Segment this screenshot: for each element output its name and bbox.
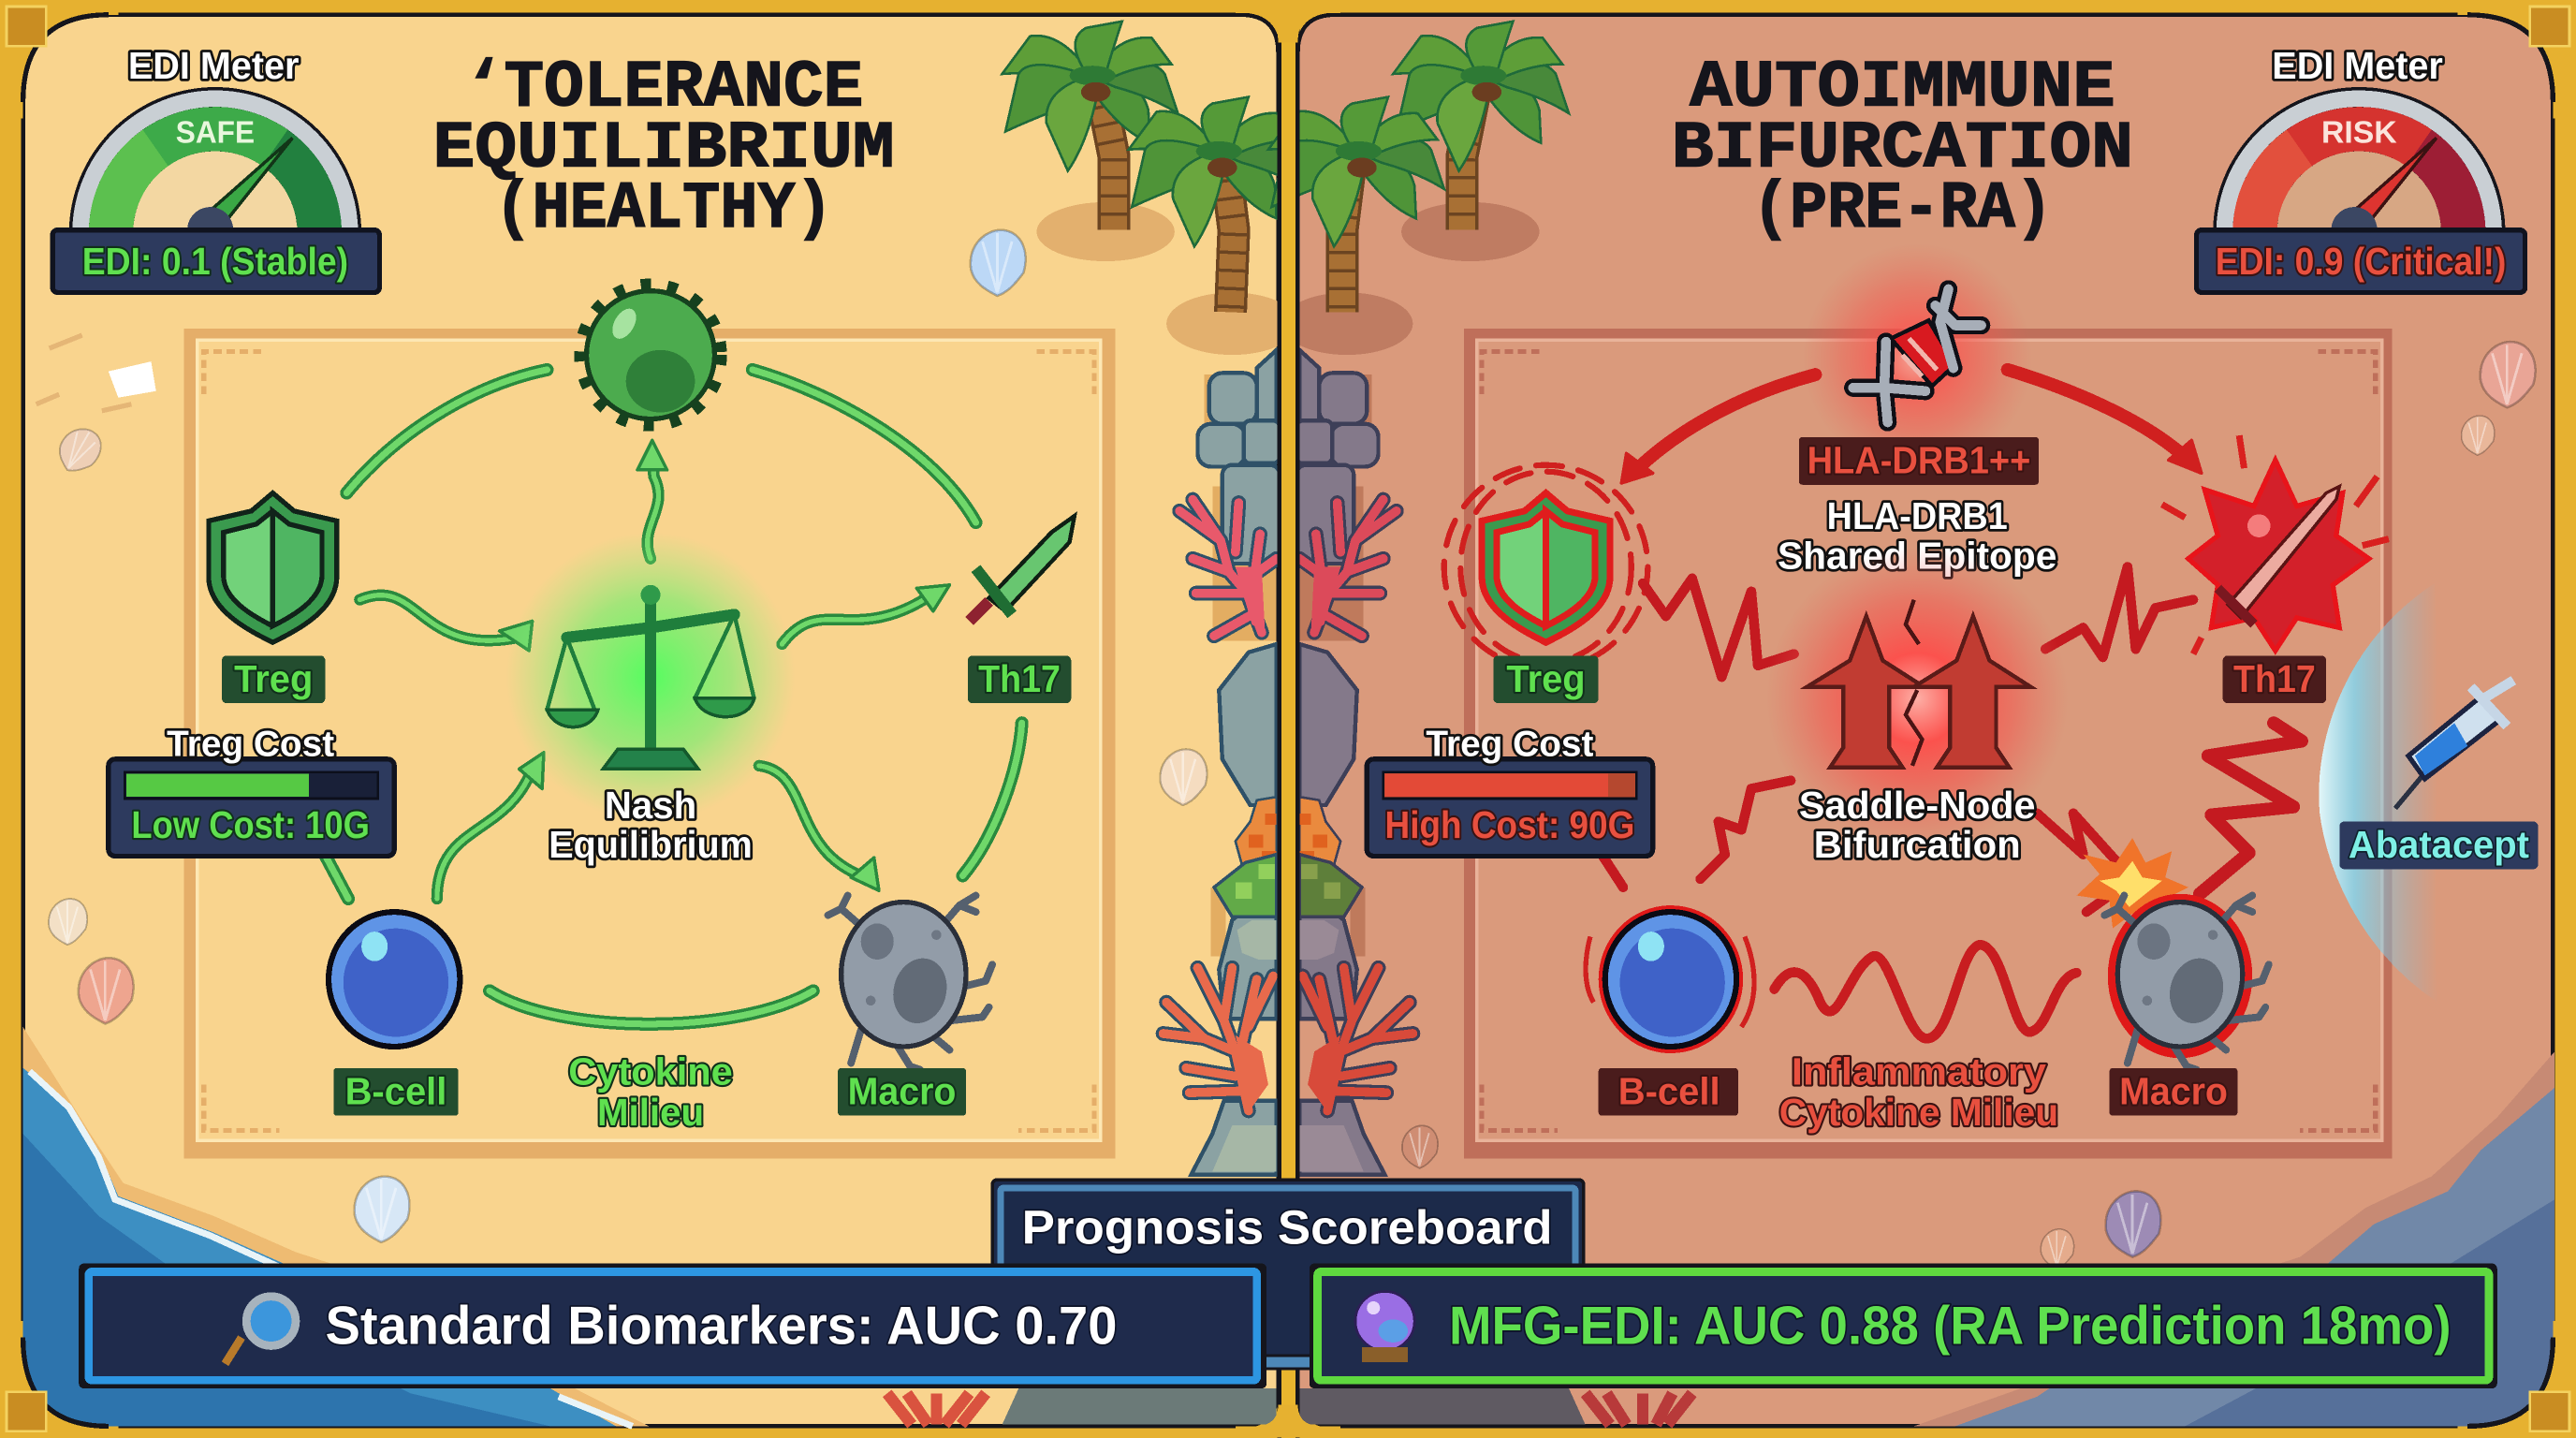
- EDI meter risk: EDI Meter: [2272, 44, 2443, 87]
- title left: [432, 51, 895, 247]
- icon: glowing balance scales: [506, 533, 795, 822]
- text: Inflammatory Cytokine Milieu: [1779, 1049, 2058, 1134]
- diagram frame left: [184, 329, 1116, 1158]
- reef base left: [887, 1388, 1277, 1425]
- title right: AUTOIMMUNE: [1690, 51, 2115, 125]
- icon: green T cell: [581, 286, 720, 424]
- sea: bottom left shore: [23, 1027, 649, 1426]
- sea: bottom right shore: [1914, 1051, 2554, 1426]
- palm tree right panel far: [1393, 22, 1569, 261]
- icon: cracked bridge bifurcation: [1766, 547, 2069, 849]
- bar: MFG-EDI: [1310, 1264, 2497, 1388]
- icon: stressed Treg shield: [1444, 465, 1647, 668]
- Treg cost meter low: Low Cost: 10G: [131, 803, 370, 846]
- gauge dial safe: SAFE: [176, 116, 255, 151]
- central gold divider: [1236, 0, 1340, 1438]
- icon: shield Treg left: [209, 493, 337, 642]
- EDI meter safe: EDI Meter: [128, 44, 300, 87]
- palm tree right panel near: [1268, 97, 1444, 355]
- title right: [1672, 51, 2133, 247]
- scoreboard tab: Prognosis Scoreboard: [1022, 1201, 1553, 1255]
- EDI value plate risk: [2197, 230, 2525, 292]
- text: HLA-DRB1 Shared Epitope: HLA-DRB1: [1827, 494, 2008, 537]
- gauge dial safe: [69, 87, 361, 253]
- reef base right: [1299, 1388, 1692, 1425]
- inflammatory wave: [1775, 945, 2076, 1038]
- bar: standard biomarkers: [79, 1264, 1266, 1388]
- icon: explosion: [2076, 838, 2188, 929]
- scoreboard tab: [992, 1180, 1584, 1295]
- icon: sword Th17: [970, 516, 1075, 621]
- title right: BIFURCATION: [1672, 112, 2133, 186]
- label B-cell right: B-cell: [1618, 1069, 1720, 1112]
- text: Inflammatory Cytokine Milieu: Cytokine Milieu: [1779, 1091, 2058, 1134]
- gauge dial risk: RISK: [2321, 116, 2397, 151]
- label B-cell left: B-cell: [345, 1069, 446, 1112]
- icon: crystal ball: [1355, 1292, 1414, 1362]
- text: Cytokine Milieu: [568, 1049, 733, 1134]
- EDI meter risk: [2197, 44, 2525, 292]
- icon: magnifying glass: [225, 1297, 296, 1364]
- reef right half: [1296, 350, 1412, 1175]
- panel: autoimmune bifurcation: [1268, 15, 2554, 1426]
- label Th17 left: Th17: [978, 657, 1061, 700]
- label Treg right: [1493, 655, 1599, 703]
- label Treg left: Treg: [234, 657, 313, 700]
- palm tree right: [1129, 97, 1305, 355]
- title left: ‘TOLERANCE: [464, 51, 863, 125]
- EDI value plate safe: EDI: 0.1 (Stable): [82, 240, 348, 283]
- label HLA-DRB1++: HLA-DRB1++: [1808, 438, 2030, 481]
- icon: blue shield barrier: [2319, 583, 2438, 1003]
- text: Nash Equilibrium: Nash: [605, 784, 696, 827]
- label B-cell right: [1599, 1068, 1738, 1116]
- reef left half: [1164, 350, 1280, 1175]
- EDI meter safe: [52, 44, 379, 292]
- Treg cost meter high: [1367, 724, 1653, 856]
- connector: [1265, 1265, 1311, 1369]
- bar: standard biomarkers: Standard Biomarkers: AUC 0.70: [326, 1297, 1117, 1357]
- icon: macrophage right: [2104, 894, 2269, 1070]
- Treg cost meter high: Treg Cost: [1426, 724, 1594, 764]
- stress zigzags: [1602, 567, 2302, 912]
- label Macro right: Macro: [2119, 1069, 2228, 1112]
- EDI value plate safe: [52, 230, 379, 292]
- icon: syringe Abatacept: [2395, 681, 2513, 809]
- Treg cost meter low: [109, 724, 394, 856]
- title left: (HEALTHY): [494, 173, 833, 247]
- text: Nash Equilibrium: Equilibrium: [549, 823, 753, 866]
- text: Nash Equilibrium: [549, 784, 753, 866]
- icon: B-cell right: [1586, 905, 1754, 1053]
- text: Inflammatory Cytokine Milieu: Inflammatory: [1792, 1049, 2047, 1093]
- Treg cost meter low: Treg Cost: [167, 724, 334, 764]
- label Treg right: Treg: [1506, 657, 1586, 700]
- label Treg left: [222, 655, 326, 703]
- icon: glowing DNA: [1802, 243, 2032, 473]
- Treg cost meter high: High Cost: 90G: [1385, 803, 1634, 846]
- text: HLA-DRB1 Shared Epitope: Shared Epitope: [1778, 534, 2056, 577]
- gauge dial risk: [2213, 87, 2506, 253]
- arrows from DNA: [1621, 370, 2202, 483]
- bar: MFG-EDI: MFG-EDI: AUC 0.88 (RA Prediction 18mo): [1449, 1297, 2452, 1357]
- icon: macrophage left: [828, 896, 992, 1070]
- icon: B-cell left: [329, 912, 460, 1047]
- icon: Th17 spiked cell with sword: [2162, 435, 2389, 654]
- reef divider: rocks and corals: [887, 350, 1692, 1425]
- text: Saddle-Node Bifurcation: Bifurcation: [1814, 823, 2021, 866]
- scoreboard: [79, 1180, 2497, 1388]
- label Abatacept: Abatacept: [2349, 823, 2529, 866]
- palm tree left: [1003, 22, 1178, 261]
- text: Saddle-Node Bifurcation: [1799, 784, 2036, 866]
- label Macro left: Macro: [848, 1069, 956, 1112]
- text: Cytokine Milieu: Milieu: [597, 1091, 704, 1134]
- label Th17 right: Th17: [2233, 657, 2316, 700]
- text: Saddle-Node Bifurcation: Saddle-Node: [1799, 784, 2036, 827]
- title right: (PRE-RA): [1752, 173, 2053, 247]
- shells right beach: [1402, 342, 2536, 1269]
- text: Cytokine Milieu: Cytokine: [568, 1049, 733, 1093]
- text: HLA-DRB1 Shared Epitope: [1778, 494, 2056, 577]
- cytokine flows left: [320, 370, 1022, 1024]
- EDI value plate risk: EDI: 0.9 (Critical!): [2216, 240, 2506, 283]
- panel: tolerance equilibrium: [23, 15, 1305, 1426]
- title left: EQUILIBRIUM: [432, 112, 895, 186]
- diagram frame right: [1464, 329, 2392, 1158]
- shells left beach: [37, 230, 1207, 1242]
